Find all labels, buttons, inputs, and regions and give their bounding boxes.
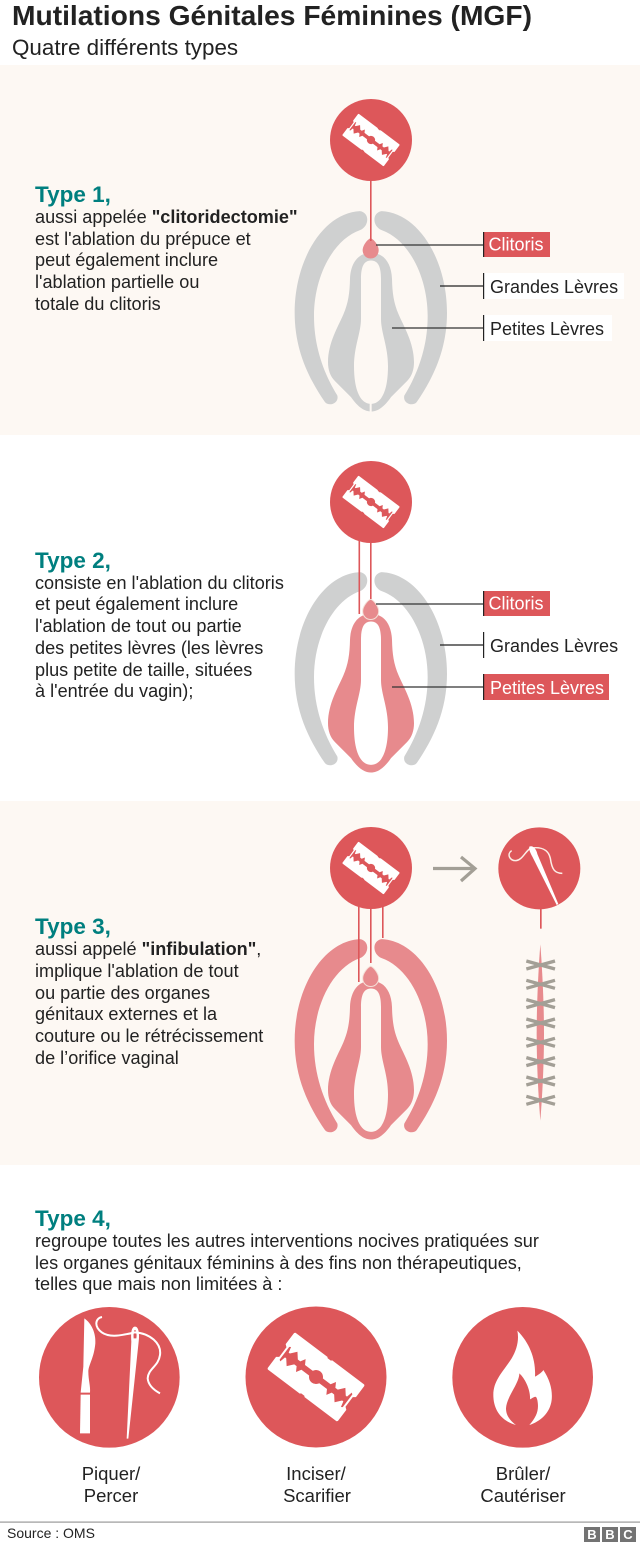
type 3 text: ou partie des organes — [35, 983, 210, 1003]
label: petites levres — [392, 674, 609, 700]
label: petites levres: Petites Lèvres — [490, 678, 604, 698]
type 4 text — [35, 1206, 539, 1294]
label: piquer percer: Percer — [84, 1485, 138, 1506]
label: grandes levres: Grandes Lèvres — [490, 636, 618, 656]
type 1 text — [35, 182, 298, 314]
label: clitoris — [376, 591, 550, 616]
label: inciser scarifier: Inciser/ — [286, 1463, 347, 1484]
type 3 text: génitaux externes et la — [35, 1004, 218, 1024]
type 3 text: couture ou le rétrécissement — [35, 1026, 263, 1046]
panel: type 4 — [35, 1206, 593, 1506]
label: clitoris: Clitoris — [488, 234, 544, 254]
type 4 text: les organes génitaux féminins à des fins non thérapeutiques, — [35, 1253, 522, 1273]
label: clitoris: Clitoris — [488, 594, 544, 614]
icon: razor circle — [330, 99, 412, 241]
type 3 text: de l’orifice vaginal — [35, 1048, 179, 1068]
source: Source : OMS — [7, 1525, 95, 1541]
type 2 text: consiste en l'ablation du clitoris — [35, 573, 284, 593]
panel: type 2 — [35, 461, 618, 772]
label: bruler cauteriser: Brûler/ — [496, 1463, 551, 1484]
icon: stitched seam — [526, 944, 555, 1121]
icon: scalpel and needle — [39, 1307, 180, 1448]
type 1 text: peut également inclure — [35, 250, 218, 270]
BBC logo: B — [587, 1527, 597, 1542]
type 1 text: aussi appelée "clitoridectomie" — [35, 207, 298, 227]
type 1 text: est l'ablation du prépuce et — [35, 229, 251, 249]
icon: razor blade — [246, 1306, 386, 1448]
type 4 text: telles que mais non limitées à : — [35, 1274, 282, 1294]
label: petites levres: Petites Lèvres — [490, 319, 604, 339]
label: clitoris — [376, 232, 550, 257]
icon: flame — [452, 1307, 593, 1448]
type 3 diagram — [295, 939, 447, 1139]
type 1 text: Type 1, — [35, 182, 111, 207]
icon: razor circle — [330, 827, 412, 982]
type 3 text: implique l'ablation de tout — [35, 961, 239, 981]
label: grandes levres — [440, 273, 624, 299]
BBC logo — [584, 1527, 636, 1542]
type 2 text: plus petite de taille, situées — [35, 660, 252, 680]
type 2 text: des petites lèvres (les lèvres — [35, 638, 263, 658]
type 3 text: Type 3, — [35, 914, 111, 939]
footer rule — [0, 1522, 640, 1523]
label: piquer percer: Piquer/ — [82, 1463, 141, 1484]
type 3 text — [35, 914, 263, 1068]
type 4 text: Type 4, — [35, 1206, 111, 1231]
type 2 text: Type 2, — [35, 548, 111, 573]
icon: needle circle — [498, 827, 580, 929]
type 2 text — [35, 548, 284, 701]
type 4 text: regroupe toutes les autres interventions nocives pratiquées sur — [35, 1231, 539, 1251]
label: petites levres — [392, 315, 612, 341]
subtitle: Quatre différents types — [12, 35, 238, 60]
icon: razor circle — [330, 461, 412, 614]
type 2 text: et peut également inclure — [35, 594, 238, 614]
type 2 text: à l'entrée du vagin); — [35, 681, 193, 701]
type 2 diagram — [295, 572, 447, 772]
BBC logo: C — [623, 1527, 633, 1542]
type 1 diagram — [295, 211, 447, 412]
type 1 text: totale du clitoris — [35, 294, 161, 314]
label: inciser scarifier: Scarifier — [283, 1485, 351, 1506]
panel: type 3 — [0, 801, 640, 1165]
label: grandes levres: Grandes Lèvres — [490, 277, 618, 297]
label: bruler cauteriser: Cautériser — [480, 1485, 566, 1506]
type 2 text: l'ablation de tout ou partie — [35, 616, 242, 636]
type 1 text: l'ablation partielle ou — [35, 272, 199, 292]
arrow — [433, 857, 475, 881]
BBC logo: B — [605, 1527, 615, 1542]
panel: type 1 — [0, 65, 640, 435]
type 3 text: aussi appelé "infibulation", — [35, 939, 261, 959]
